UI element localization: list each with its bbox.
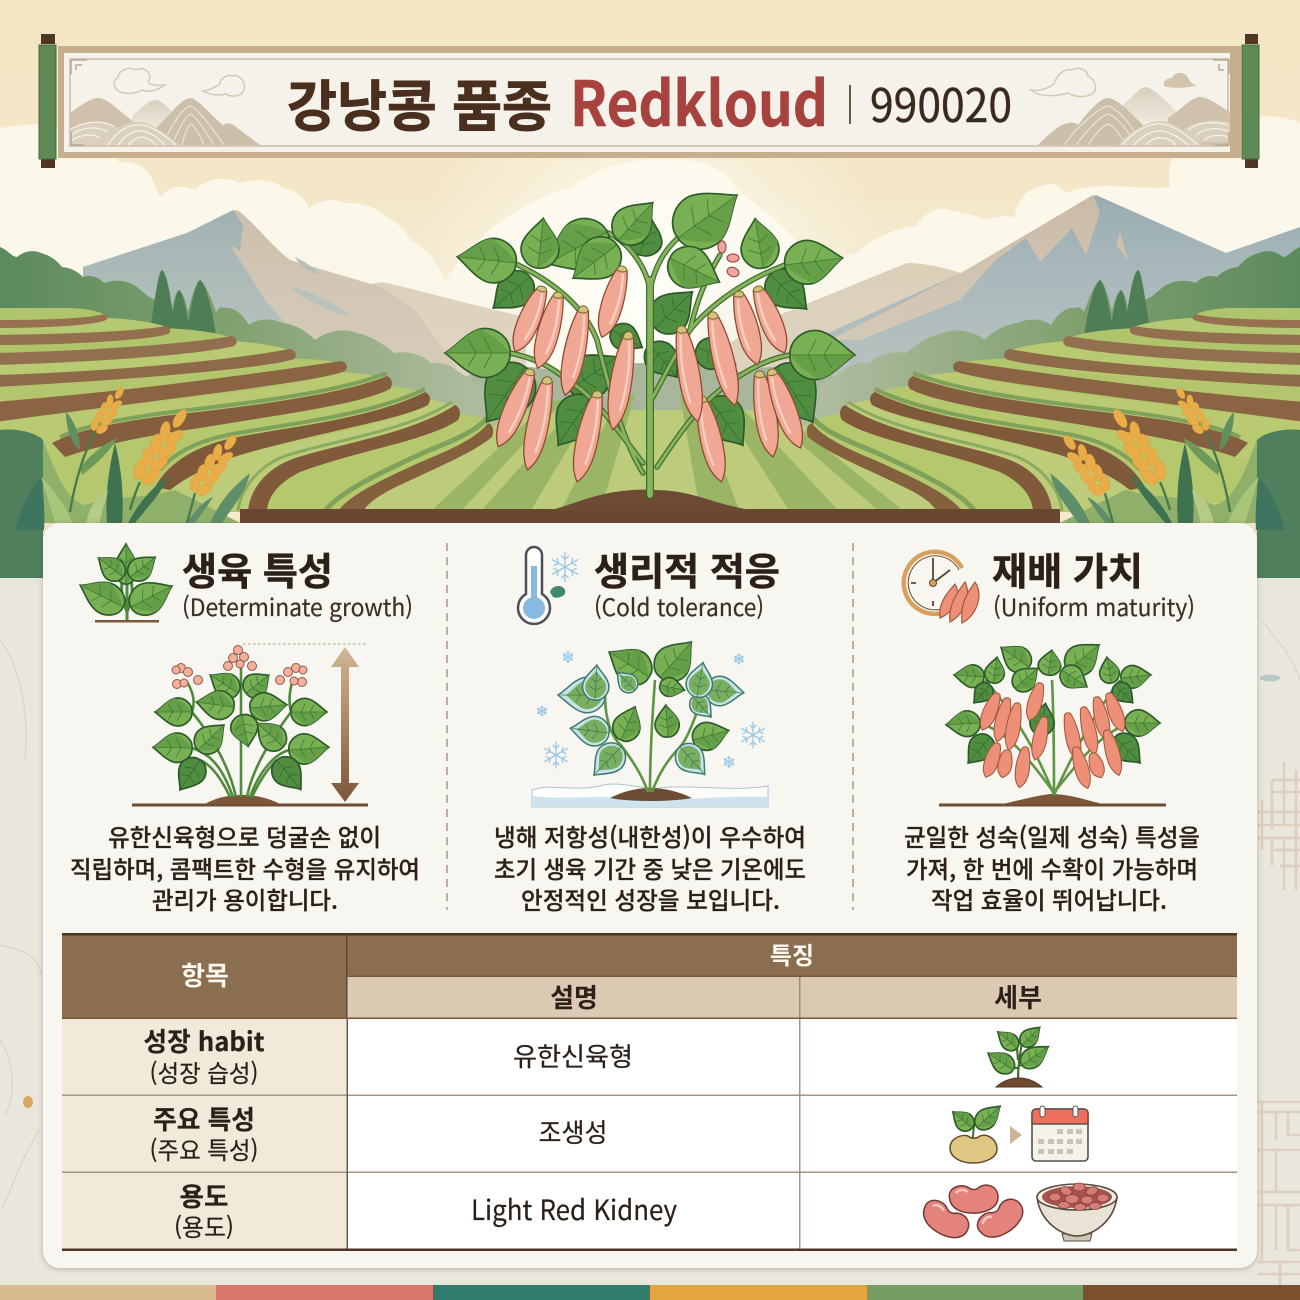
panel: growth characteristics [70,541,420,916]
description: 균일한 성숙(일제 성숙) 특성을 [904,818,1200,853]
left roller [39,34,56,168]
description: 유한신육형으로 덩굴손 없이 [108,818,381,853]
row: usage: (용도) [174,1208,234,1243]
row: growth habit [144,1021,1054,1089]
left terraces and treeline [0,247,510,512]
panel: cultivation value [904,541,1200,916]
left foreground grass and wheat [0,382,250,578]
row: main trait [150,1099,1088,1166]
arrow: triangle [1010,1126,1022,1144]
row: growth habit: 성장 habit [144,1022,265,1059]
pods [489,263,810,484]
description [904,818,1200,916]
icon: clock with pods [904,552,979,623]
subheading: (Uniform maturity) [993,588,1195,623]
title variety name: Redkloud [570,54,828,144]
row: main trait: (주요 특성) [150,1131,258,1166]
description: 직립하며, 콤팩트한 수형을 유지하여 [70,850,420,885]
row: usage: 용도 [180,1177,228,1214]
title text: 강낭콩 품종 [287,62,552,142]
illustration: plant in snow [532,630,768,807]
column divider right [852,543,854,910]
lattice ornament lower [1258,1102,1300,1285]
subheading: (Determinate growth) [182,588,413,623]
row: growth habit: (성장 습성) [150,1054,258,1089]
icon: sprout [983,1021,1054,1087]
right mountain [700,190,1300,420]
row: main trait: 조생성 [538,1113,608,1150]
table body background [62,1018,1237,1251]
distant treeline behind plant [430,363,870,410]
row: usage [174,1177,1117,1245]
front leaves [445,173,855,380]
table header [62,933,1237,1018]
main info panel [43,523,1257,1268]
height dotted line [243,643,368,645]
lattice ornament upper [1258,762,1300,890]
soil strip [240,509,1060,525]
title separator [849,85,851,124]
bottom colour bar [0,1285,1300,1300]
heading: 생리적 적응 [594,541,780,596]
table header: 세부 [994,978,1042,1015]
background sky [0,0,1300,580]
row: growth habit: 유한신육형 [513,1037,633,1074]
right ornament mountains and clouds [1031,60,1230,145]
field furrows [430,395,905,512]
icon: thermometer and snowflake [518,547,578,624]
scroll frame [58,46,1241,158]
panel: physiological adaptation [494,541,806,916]
description: 가져, 한 번에 수확이 가능하며 [906,850,1198,885]
illustration: plant with uniform pods [939,633,1166,806]
title number: 990020 [870,70,1012,136]
heading: 재배 가치 [992,541,1143,596]
glow behind plant [410,50,890,530]
right terraces and treeline [790,247,1300,512]
table header: 특징 [770,936,814,971]
description: 작업 효율이 뛰어납니다. [931,881,1167,916]
right foreground grass and wheat [1050,382,1300,578]
subheading: (Cold tolerance) [594,588,764,623]
illustration: flowering compact plant [132,646,368,806]
title scroll banner [39,34,1259,168]
row: main trait: 주요 특성 [153,1100,255,1137]
description: 안정적인 성장을 보입니다. [521,881,780,916]
column divider left [446,543,448,910]
back leaves [466,212,834,458]
snowflakes [537,651,765,768]
right roller [1242,34,1259,168]
table header: 항목 [181,956,229,993]
clouds [0,116,1300,400]
specification table [62,933,1237,1251]
hero bean plant [445,173,855,511]
stems [510,232,790,495]
left mountain [83,190,543,420]
paper background [0,577,1300,1300]
description: 냉해 저항성(내한성)이 우수하여 [494,818,806,853]
scroll paper [64,53,1230,152]
description: 초기 생육 기간 중 낮은 기온에도 [494,850,806,885]
flower buds [718,241,740,278]
icon: sprout [73,544,179,622]
row: usage: Light Red Kidney [471,1189,677,1229]
description [70,818,420,916]
icon: bowl of beans [1037,1183,1117,1241]
description: 관리가 용이합니다. [152,881,338,916]
left ornament mountains and clouds [70,60,260,145]
icon: calendar [1032,1106,1088,1161]
heading: 생육 특성 [182,541,333,596]
table header: 설명 [550,978,598,1015]
base field [360,385,940,520]
icon: kidney beans [917,1185,1029,1245]
icon: seedling on bean [947,1099,1007,1163]
arrow: plant height [331,647,359,802]
description [494,818,806,916]
